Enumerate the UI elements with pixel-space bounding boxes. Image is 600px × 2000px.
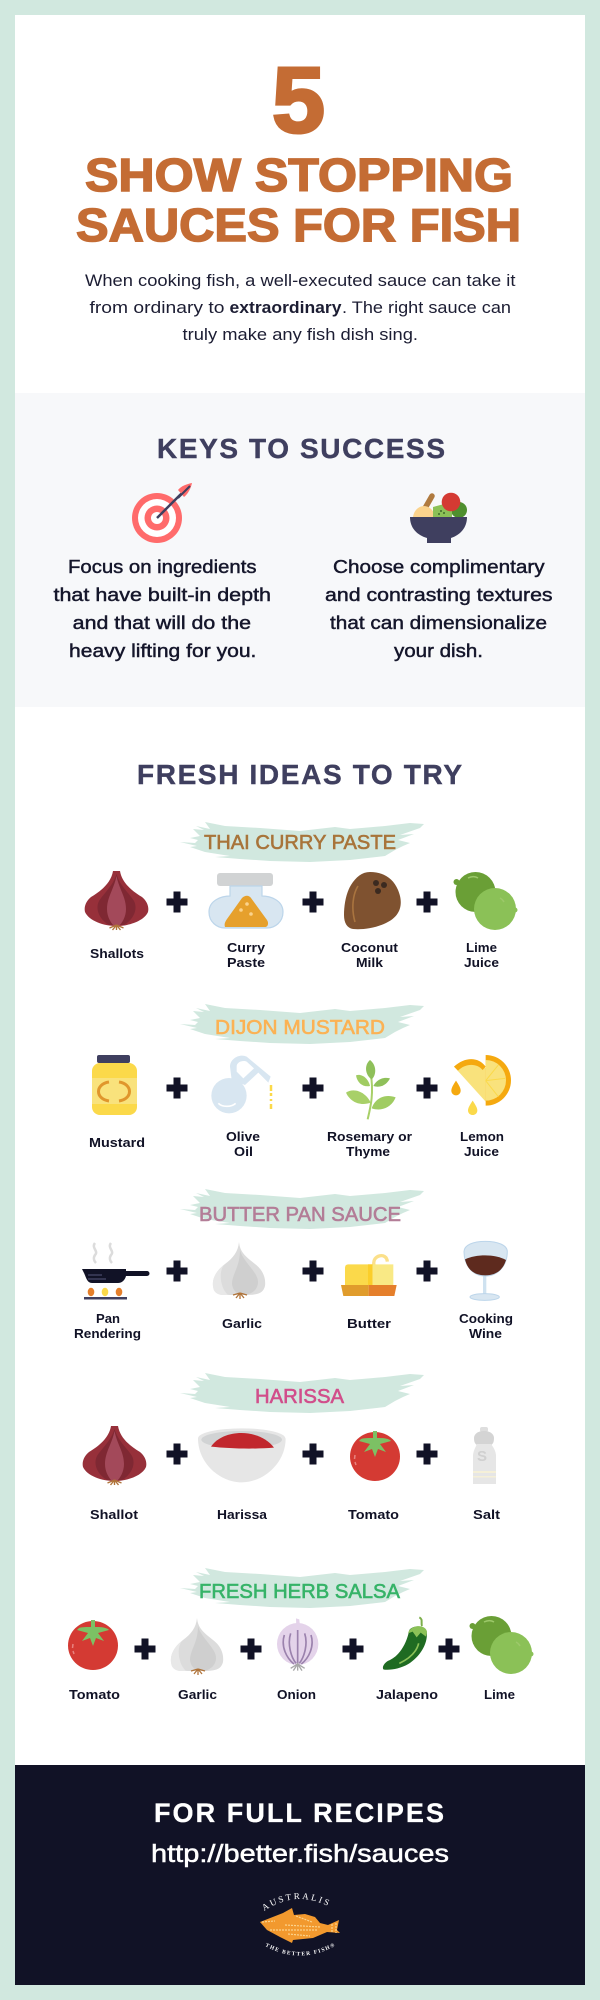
icon: salad bowl [410,493,467,543]
ingredient labels: Thyme [346,1144,390,1159]
heading: keys to success: KEYS TO SUCCESS [157,433,445,464]
plus sign [134,1638,156,1660]
plus sign [302,1444,324,1464]
ingredient labels [89,1129,504,1159]
title number 5: 5 [272,48,325,152]
icon: shallot [83,1426,146,1485]
icon: wine glass [464,1241,507,1300]
brush stroke [180,1568,424,1608]
plus sign [302,1078,324,1098]
panel: keys to success [15,393,585,707]
ingredient labels: Mustard [89,1135,145,1150]
plus sign [416,892,438,912]
icon: limes [470,1616,534,1674]
plus sign [166,1444,188,1464]
plus sign [166,892,188,912]
ingredient labels: Cooking [459,1311,513,1326]
sauce name: THAI CURRY PASTE [204,832,396,854]
logo: australis fish: AUSTRALIS [263,1893,330,1911]
plus sign [166,1260,188,1282]
plus sign [166,1078,188,1098]
intro paragraph [85,271,516,344]
ingredient labels [90,940,499,970]
sauce name: DIJON MUSTARD [215,1017,385,1039]
icon: garlic [171,1618,223,1675]
plus sign [240,1638,262,1660]
text: choose complimentary: and contrasting textures [325,584,553,605]
ingredient labels: Lime [466,940,497,955]
plus sign [302,892,324,912]
icon: target with arrow [132,483,192,543]
icon: limes [454,872,518,930]
text: focus on ingredients: that have built-in depth [54,584,271,605]
ingredient labels: Pan [96,1311,120,1326]
ingredient labels: Tomato [69,1687,120,1702]
plus sign [416,1078,438,1098]
icon: pan on burner [82,1243,150,1300]
ingredient labels: Salt [473,1507,501,1522]
panel: dijon mustard [89,1004,511,1159]
ingredient labels: Rosemary or [327,1129,412,1144]
icon: coconut [344,872,401,929]
text: focus on ingredients: heavy lifting for you. [69,640,256,661]
ingredient labels: Coconut [341,940,399,955]
sauce name: HARISSA [255,1386,345,1408]
icon: salt shaker [473,1427,496,1484]
ingredient labels: Oil [234,1144,253,1159]
ingredient labels [69,1687,515,1702]
ingredient labels: Garlic [222,1316,262,1331]
plus sign [438,1638,460,1660]
plus sign [416,1444,438,1464]
title line 1: SHOW STOPPING [85,149,513,201]
text: focus on ingredients: and that will do the [73,612,251,633]
logo: australis fish [260,1893,340,1956]
icon: onion [277,1618,318,1671]
ingredient labels: Milk [356,955,384,970]
title block [76,48,521,251]
ingredient labels: Garlic [178,1687,217,1702]
ingredient labels: Juice [464,955,499,970]
plus sign [342,1638,364,1660]
panel: fresh herb salsa [68,1568,534,1702]
plus sign [302,1260,324,1282]
icon: shallot [85,871,148,930]
text: choose complimentary: Choose complimentary [333,556,545,577]
icon: herb sprig [346,1060,396,1119]
brush stroke [180,1004,424,1044]
panel: butter pan sauce [74,1189,513,1341]
icon: salt shaker: S [477,1448,487,1465]
icon: garlic [213,1242,265,1299]
ingredient labels: Butter [347,1316,391,1331]
heading: for full recipes: FOR FULL RECIPES [154,1798,444,1828]
logo: australis fish: THE BETTER FISH® [266,1942,334,1956]
intro paragraph: . The right sauce can [342,298,511,317]
brush stroke [180,1189,424,1229]
text: choose complimentary: your dish. [394,640,483,661]
icon: olive oil bottle [211,1056,271,1113]
icon: tomato [68,1620,118,1670]
panel: footer [15,1765,585,1985]
icon: tomato [350,1431,400,1481]
ingredient labels: Shallots [90,946,144,961]
ingredient labels: Rendering [74,1326,141,1341]
intro paragraph: truly make any fish dish sing. [182,325,418,344]
ingredient labels: Shallot [90,1507,139,1522]
panel: harissa [83,1373,501,1522]
ingredient labels: Paste [227,955,265,970]
ingredient labels: Juice [464,1144,499,1159]
intro paragraph: When cooking fish, a well-executed sauce can take it [85,271,516,290]
recipe url: http://better.fish/sauces [151,1840,449,1868]
ingredient labels: Jalapeno [376,1687,438,1702]
icon: lemon [451,1055,511,1115]
text: focus on ingredients [54,556,271,661]
ingredient labels: Olive [226,1129,260,1144]
ingredient labels: Harissa [217,1507,268,1522]
icon: harissa bowl [198,1428,286,1482]
sauce name: BUTTER PAN SAUCE [199,1204,401,1226]
ingredient labels: Curry [227,940,266,955]
heading: fresh ideas to try: FRESH IDEAS TO TRY [137,759,462,790]
plus sign [416,1260,438,1282]
ingredient labels: Wine [469,1326,502,1341]
icon: curry paste jar [209,873,283,928]
ingredient labels: Lemon [460,1129,504,1144]
icon: mustard jar [92,1055,137,1115]
panel: thai curry paste [85,822,517,970]
ingredient labels: Tomato [348,1507,399,1522]
ingredient labels [90,1507,501,1522]
text: focus on ingredients: Focus on ingredients [68,556,256,577]
brush stroke [180,1373,424,1413]
intro paragraph: extraordinary [230,298,342,317]
ingredient labels [74,1311,513,1341]
icon: butter [341,1256,397,1296]
sauce name: FRESH HERB SALSA [199,1581,401,1603]
title line 2: SAUCES FOR FISH [76,199,521,251]
intro paragraph: from ordinary to [90,298,224,317]
ingredient labels: Onion [277,1687,316,1702]
text: choose complimentary [325,556,553,661]
text: choose complimentary: that can dimensionalize [330,612,547,633]
brush stroke [180,822,424,862]
icon: jalapeno [383,1617,427,1670]
ingredient labels: Lime [484,1687,515,1702]
